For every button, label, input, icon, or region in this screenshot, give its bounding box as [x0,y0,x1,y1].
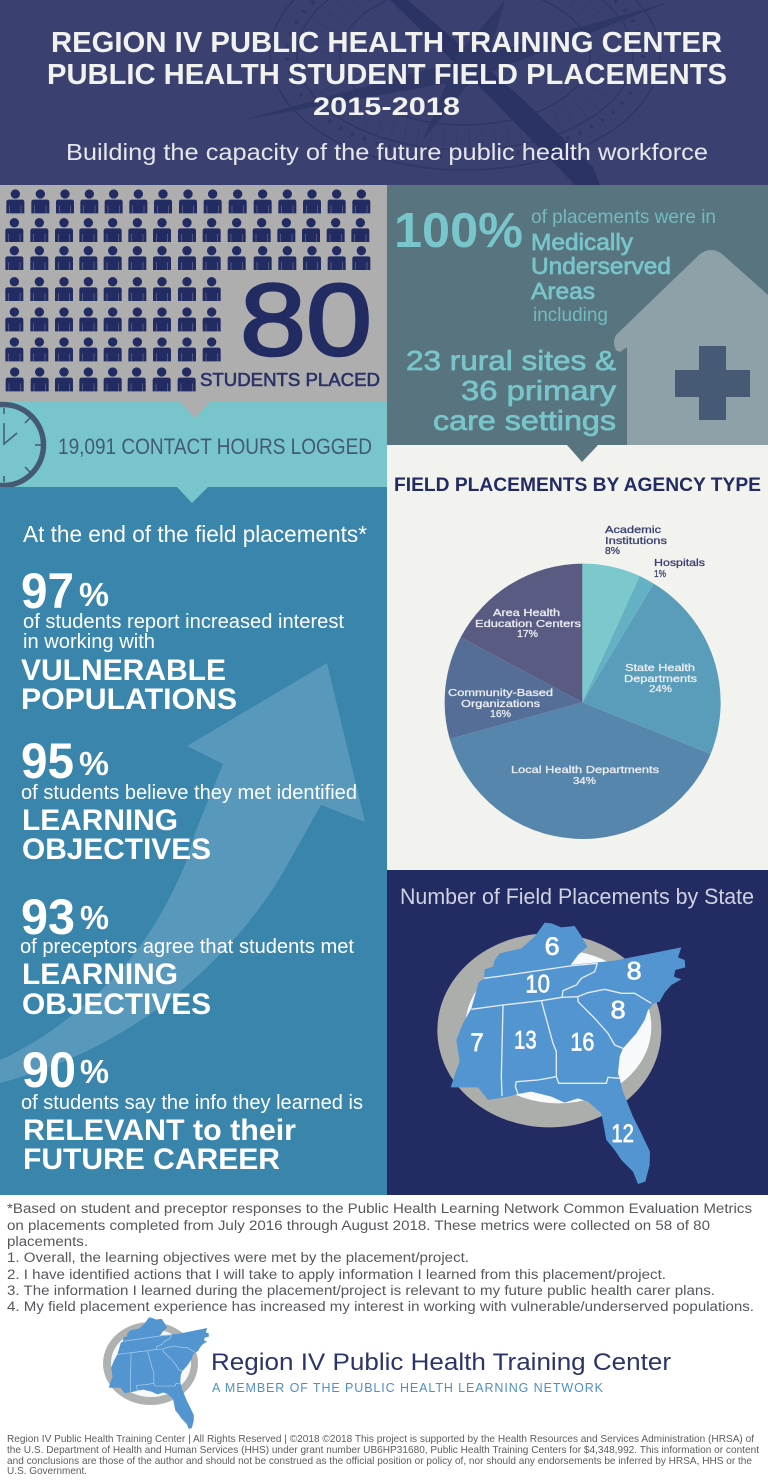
panel: medically underserved areas [387,185,768,445]
stat: 90%: % [80,1053,109,1090]
compass background [243,0,670,185]
stat: 97%: VULNERABLE [21,654,226,687]
panel: contact hours [0,402,387,487]
heading: agency type: FIELD PLACEMENTS BY AGENCY TYPE [394,474,761,496]
pie labels: Education Centers [475,618,581,630]
legal disclaimer: and conclusions are those of the author and should not be construed as the official position or policy of, nor should any endorsements be inferred by HRSA, HHS or the [7,1455,752,1467]
rural and primary care text: 23 rural sites & [406,345,616,376]
arrow: upward background [0,663,365,1083]
underserved areas text: Medically [531,229,633,255]
panel: field placements by agency type [387,445,768,870]
logo text [211,1349,671,1395]
big number 80: 80 [240,263,372,377]
logo text: A MEMBER OF THE PUBLIC HEALTH LEARNING NETWORK [212,1381,604,1395]
panel: end of placement results [0,487,387,1195]
title: PUBLIC HEALTH STUDENT FIELD PLACEMENTS [47,59,727,91]
rural and primary care text [406,345,616,436]
pie labels: 34% [573,775,596,787]
pie labels: Organizations [461,698,540,710]
panel: placements by state [387,870,768,1195]
stat: 93%: of preceptors agree that students met [20,936,354,958]
icon: clock [0,404,44,486]
footnote text: 2. I have identified actions that I will take to apply information I learned from this placement/project. [7,1267,666,1282]
stat: 97%: of students report increased interest [23,611,344,633]
pie labels: 17% [517,628,538,640]
stat: 93% [20,889,354,1021]
stat: 93%: LEARNING [22,958,178,991]
title: 2015-2018 [313,93,460,121]
subtitle: Building the capacity of the future public health workforce [66,139,708,165]
legal disclaimer [7,1433,759,1477]
underserved areas text: Areas [531,278,595,304]
logo text: Region IV Public Health Training Center [211,1349,671,1376]
stat: 95%: of students believe they met identified [21,782,357,804]
underserved areas text: of placements were in [531,206,716,228]
stat: 90% [21,1042,363,1176]
state counts [470,933,642,1148]
pie labels: Local Health Departments [511,764,659,776]
stat: 93%: OBJECTIVES [22,988,211,1021]
stat: 97%: % [79,576,109,613]
pie labels: State Health [625,662,695,674]
stat: 95%: 95 [21,733,74,789]
stat: 93%: % [80,899,109,936]
stat: 90%: FUTURE CAREER [23,1143,280,1176]
footnote text [7,1201,754,1314]
footnote text: placements. [7,1234,88,1249]
footnote text: on placements completed from July 2016 through August 2018. These metrics were collected on 58 of 80 [7,1218,710,1233]
legal disclaimer: U.S. Government. [7,1465,87,1477]
stat: 93%: 93 [21,889,75,945]
pie labels: 1% [654,568,666,580]
heading: by state: Number of Field Placements by State [400,884,754,909]
underserved areas text: Underserved [531,253,671,279]
intro heading: At the end of the field placements* [23,521,367,547]
panel: students placed [0,185,387,402]
pie labels: 8% [605,545,620,557]
underserved areas text [531,206,716,326]
state counts: 13 [514,1027,537,1055]
pie labels: Academic [605,524,661,536]
stat: 90%: of students say the info they learned is [21,1092,363,1114]
pie labels [448,524,705,787]
footnote text: *Based on student and preceptor responses to the Public Health Learning Network Common Evaluation Metrics [7,1201,752,1216]
title: REGION IV PUBLIC HEALTH TRAINING CENTER [51,27,722,59]
stat: 95%: OBJECTIVES [22,833,211,866]
pie chart [445,564,721,839]
state counts: 6 [545,933,560,961]
underserved areas text: including [533,305,608,326]
stat: 95% [21,733,357,866]
stat: 97%: POPULATIONS [21,683,237,716]
students placed label: STUDENTS PLACED [200,370,380,390]
footnote text: 1. Overall, the learning objectives were met by the placement/project. [7,1250,469,1265]
footnote text: 4. My field placement experience has increased my interest in working with vulnerable/underserved populations. [7,1299,754,1314]
stat: 97% [21,563,344,716]
state counts: 8 [627,958,642,986]
legal disclaimer: the U.S. Department of Health and Human Services (HHS) under grant number UB6HP31680, Public Health Training Centers for $4,348,992. This information or content [7,1444,759,1456]
state counts: 7 [470,1029,484,1057]
100% statistic: 100% [394,204,523,258]
stat: 97%: in working with [23,631,155,653]
legal disclaimer: Region IV Public Health Training Center | All Rights Reserved | ©2018 ©2018 This project is supported by the Health Resources and Services Administration (HRSA) of [7,1433,754,1445]
panel: header [0,0,768,185]
logo: region IV map [103,1317,209,1429]
stat: 95%: LEARNING [22,804,178,837]
icon grid: 80 students [5,189,370,391]
rural and primary care text: 36 primary [461,375,616,406]
stat: 95%: % [79,745,109,782]
title [47,27,727,121]
pie labels: 24% [649,683,672,695]
pie labels: Area Health [493,607,560,619]
pie labels: Community-Based [448,687,553,699]
pie labels: Institutions [605,535,667,547]
state counts: 12 [611,1120,634,1148]
pie labels: 16% [490,708,511,720]
state counts: 10 [525,971,550,999]
rural and primary care text: care settings [433,405,616,436]
stat: 90%: 90 [22,1042,76,1098]
pie labels: Hospitals [654,557,705,569]
state counts: 8 [611,997,626,1025]
contact hours text: 19,091 CONTACT HOURS LOGGED [58,434,372,459]
pie labels: Departments [624,673,697,685]
map of region IV states [437,923,685,1184]
stat: 90%: RELEVANT to their [23,1114,296,1147]
icon: house with cross [614,250,768,445]
footnote text: 3. The information I learned during the placement/project is relevant to my future public health carer plans. [7,1283,715,1298]
stat: 97%: 97 [21,563,74,619]
state counts: 16 [570,1028,594,1056]
